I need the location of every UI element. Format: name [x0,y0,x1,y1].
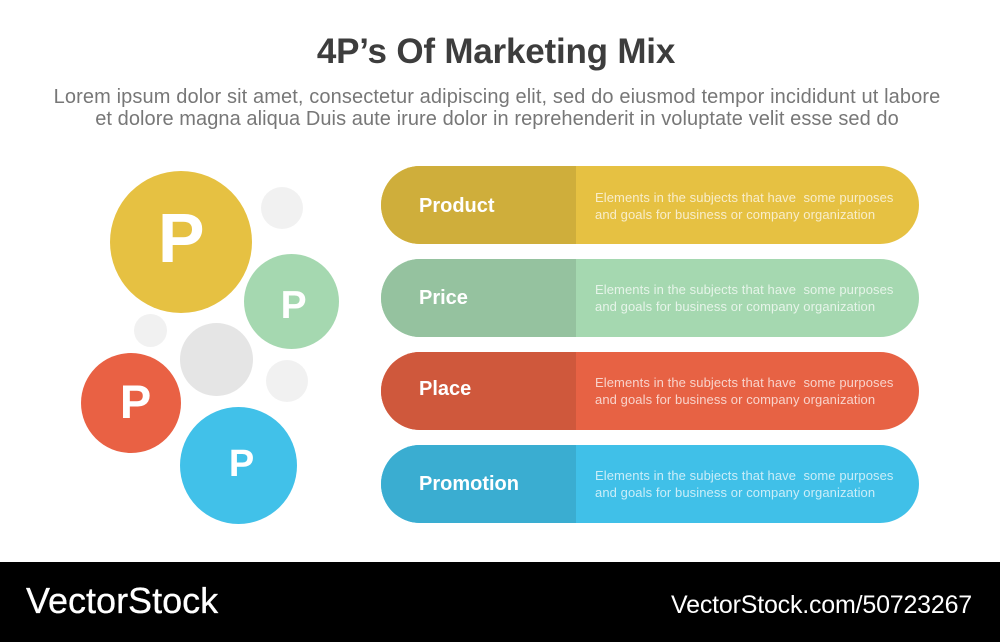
decorative bubble [261,187,303,229]
bubble: price [244,254,339,349]
footer url: VectorStock.com/50723267 [671,590,972,618]
bar: price: Price [419,286,468,308]
bubble: place [81,353,181,453]
bubble: product: P [158,199,205,277]
bar: promotion: Elements in the subjects that have some purposes [595,468,894,483]
bar: place: Elements in the subjects that have some purposes [595,375,894,390]
bar: promotion [381,445,919,523]
bar: price: and goals for business or company organization [595,299,875,314]
bar: product: Elements in the subjects that have some purposes [595,190,894,205]
bar: promotion: and goals for business or company organization [595,485,875,500]
bubble: promotion [180,407,297,524]
bubble: promotion: P [229,443,254,485]
decorative bubble [266,360,308,402]
decorative bubble [180,323,253,396]
subtitle: Lorem ipsum dolor sit amet, consectetur adipiscing elit, sed do eiusmod tempor incididunt ut labore [54,86,940,108]
title: 4P’s Of Marketing Mix [317,32,675,71]
bubble: price: P [281,284,307,327]
subtitle: et dolore magna aliqua Duis aute irure dolor in reprehenderit in voluptate velit esse sed do [95,108,899,130]
footer band [0,562,1000,642]
bar: place: Place [419,378,471,400]
decorative bubble [134,314,167,347]
bar: price: Elements in the subjects that have some purposes [595,282,894,297]
subtitle [54,86,940,130]
bar: product: and goals for business or company organization [595,207,875,222]
bubble: place: P [120,375,151,428]
bubble cluster [81,171,339,524]
footer logo: VectorStock [26,580,218,620]
bar: promotion: Promotion [419,473,519,495]
bubble: product [110,171,252,313]
bar: product: Product [419,195,495,217]
bar: price [381,259,919,337]
bar: place [381,352,919,430]
bar: place: and goals for business or company organization [595,392,875,407]
bar: product [381,166,919,244]
